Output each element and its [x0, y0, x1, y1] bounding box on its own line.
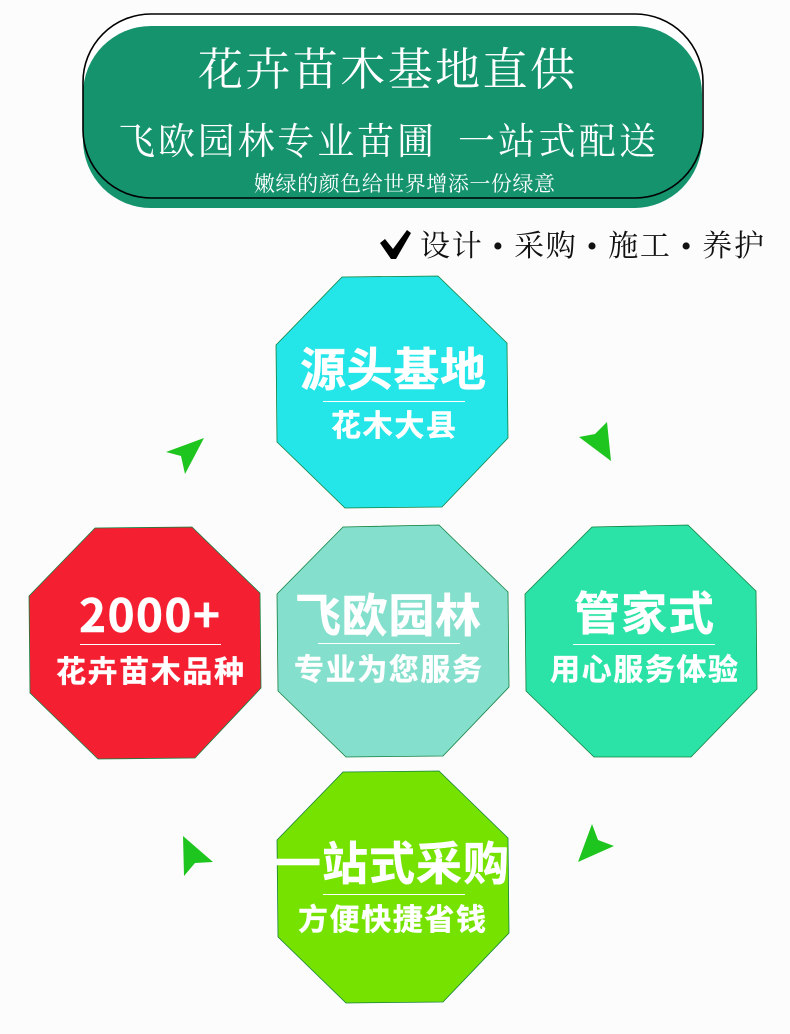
services text: 设计 • 采购 • 施工 • 养护 [420, 230, 764, 263]
arrow: bottom left [183, 836, 213, 876]
panel: one-stop purchase [275, 771, 509, 1003]
heading: 飞欧园林 [295, 580, 481, 646]
heading: 一站式采购 [275, 828, 509, 894]
panel: 2000+ varieties [29, 527, 261, 759]
arrow: bottom right [578, 824, 614, 862]
services line [380, 230, 764, 263]
title: 花卉苗木基地直供 [198, 45, 576, 95]
subheading: 花木大县 [331, 401, 456, 445]
heading: 源头基地 [300, 334, 486, 400]
heading: 管家式 [574, 578, 714, 644]
subtitle left: 飞欧园林专业苗圃 [118, 121, 434, 163]
panel: centre brand [277, 525, 509, 757]
subheading: 方便快捷省钱 [298, 895, 486, 939]
subheading: 花卉苗木品种 [56, 647, 244, 691]
heading: 2000+ [79, 580, 220, 646]
header banner [83, 14, 703, 208]
arrow: top left [166, 438, 204, 474]
panel: source base [276, 276, 508, 508]
subtitle right: 一站式配送 [458, 121, 656, 163]
subheading: 专业为您服务 [294, 645, 482, 689]
arrow: top right [579, 422, 611, 461]
icon: check mark [380, 230, 411, 259]
panel: butler service [525, 525, 757, 757]
subheading: 用心服务体验 [550, 645, 738, 689]
slogan: 嫩绿的颜色给世界增添一份绿意 [254, 172, 555, 196]
